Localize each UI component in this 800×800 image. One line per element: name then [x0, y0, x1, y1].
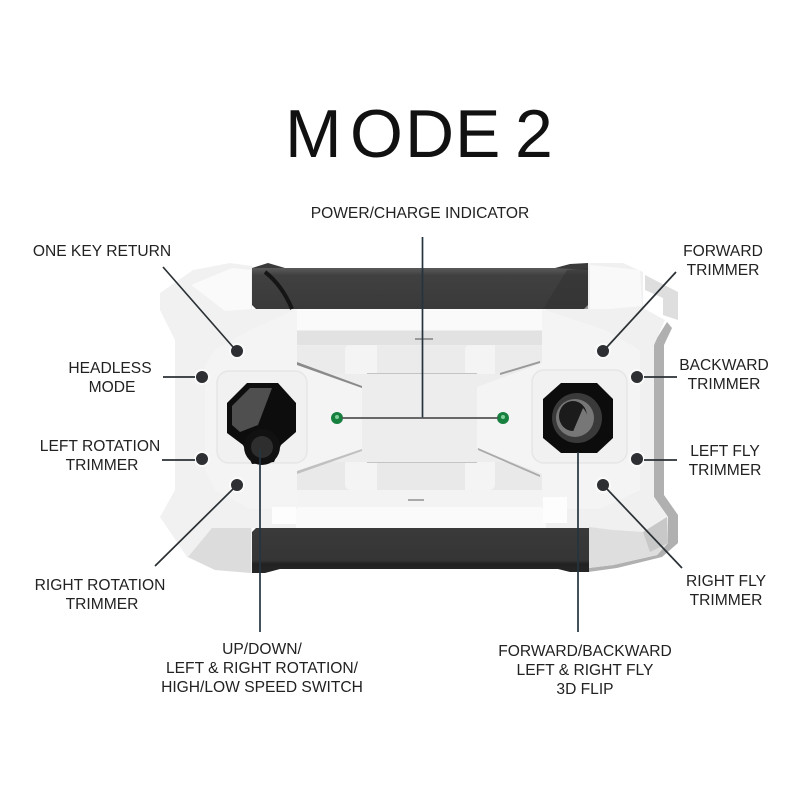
bottom grip — [252, 528, 589, 573]
left shell — [160, 263, 300, 573]
right wing panel — [477, 309, 640, 509]
label: up/down left and right rotation speed switch — [161, 641, 363, 696]
label: forward/backward left and right fly 3D flip: FORWARD/BACKWARD — [498, 643, 672, 660]
label: backward trimmer: TRIMMER — [688, 376, 760, 393]
label: right rotation trimmer: RIGHT ROTATION — [35, 577, 165, 594]
centre battery bay — [296, 309, 546, 528]
label: left fly trimmer: LEFT FLY — [690, 443, 760, 460]
label: up/down left and right rotation speed switch: HIGH/LOW SPEED SWITCH — [161, 679, 363, 696]
label: backward trimmer — [679, 357, 769, 393]
left wing panel — [205, 309, 362, 509]
label: forward trimmer: FORWARD — [683, 243, 763, 260]
controller body — [160, 263, 678, 573]
label: one key return: ONE KEY RETURN — [33, 243, 171, 260]
right rim — [588, 322, 678, 572]
label: right rotation trimmer: TRIMMER — [66, 596, 138, 613]
label: right fly trimmer: TRIMMER — [690, 592, 762, 609]
label: headless mode: MODE — [89, 379, 135, 396]
top grip — [252, 268, 588, 309]
indicator lights — [331, 412, 509, 424]
label: right rotation trimmer — [35, 577, 165, 613]
label: left fly trimmer: TRIMMER — [689, 462, 761, 479]
clip blocks — [272, 507, 296, 524]
label: right fly trimmer: RIGHT FLY — [686, 573, 767, 590]
label: left rotation trimmer: TRIMMER — [66, 457, 138, 474]
right joystick — [543, 383, 613, 453]
buttons — [195, 344, 644, 492]
label: forward trimmer: TRIMMER — [687, 262, 759, 279]
handle loop — [645, 275, 678, 320]
right stick recess — [532, 370, 627, 463]
label: left rotation trimmer — [40, 438, 160, 474]
label: power/charge indicator: POWER/CHARGE INDICATOR — [311, 205, 529, 222]
right shell — [540, 263, 668, 568]
label: backward trimmer: BACKWARD — [679, 357, 769, 374]
leader lines — [155, 237, 682, 632]
label: forward trimmer — [683, 243, 763, 279]
latch tabs — [345, 345, 377, 374]
label: up/down left and right rotation speed switch: LEFT & RIGHT ROTATION/ — [166, 660, 359, 677]
label: right fly trimmer — [686, 573, 767, 609]
label: headless mode — [68, 360, 152, 396]
label: up/down left and right rotation speed switch: UP/DOWN/ — [222, 641, 303, 658]
label: left rotation trimmer: LEFT ROTATION — [40, 438, 160, 455]
left stick recess — [217, 371, 307, 463]
label: forward/backward left and right fly 3D flip — [498, 643, 672, 698]
label: forward/backward left and right fly 3D flip: LEFT & RIGHT FLY — [517, 662, 654, 679]
label: left fly trimmer — [689, 443, 761, 479]
label: forward/backward left and right fly 3D flip: 3D FLIP — [556, 681, 614, 698]
label: headless mode: HEADLESS — [68, 360, 152, 377]
title: MODE 2 — [285, 96, 553, 172]
left joystick — [227, 383, 296, 465]
